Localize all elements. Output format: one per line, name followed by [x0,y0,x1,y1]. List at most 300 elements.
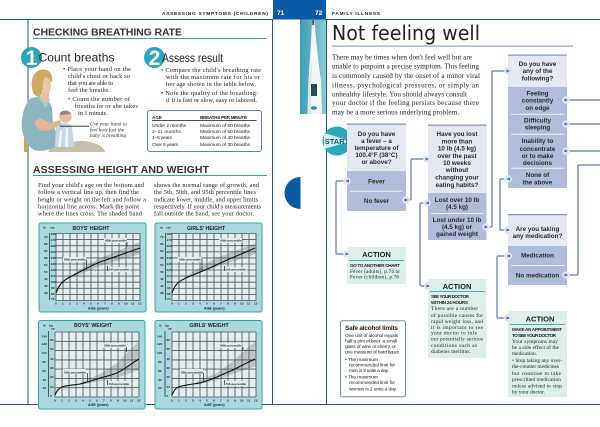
chart: girls' height: 160 [166,244,172,248]
chart: girls' height: AGE (years) [204,306,225,310]
chart: girls' height: GIRLS' HEIGHT [187,226,226,232]
chart: boys' weight: 120 [42,342,47,346]
heading: assessing height and weight: ASSESSING HEIGHT AND WEIGHT [33,164,210,176]
step 1 text: child's chest or back so [68,73,130,80]
chart: boys' weight: 95th percentile [104,344,126,348]
step 2 text: if it is fast or slow, easy or labored. [166,97,257,104]
chart: girls' height: 58 [160,256,164,260]
step 2 text: her age shown in the table below. [166,81,256,88]
chart: boys' weight: 8 [110,398,112,402]
intro paragraph: is commonly caused by the onset of a minor viral [332,72,480,80]
flow box: medication question [508,214,567,285]
chart: boys' weight: 10 [123,398,127,402]
photo caption with leader: feel how fast the [90,128,125,133]
chart: boys' weight: 50th percentile [64,370,86,374]
step 1 text: that you are able to [68,80,113,87]
chart: girls' weight: 40 [158,378,162,382]
chart: boys' weight: 1 [61,398,63,402]
chart: girls' height: 110 [166,274,172,278]
action box: see your doctor within 24 hours [428,279,486,358]
breathing rate table: AGE [152,115,162,120]
blue page tab half circle [284,177,300,209]
chart: boys' height: 8 [111,302,113,306]
chart: boys' height: cm [50,226,55,230]
action box: see your doctor within 24 hours: There are a number [431,306,478,312]
chart: boys' weight: 0 [50,394,52,398]
chart: boys' weight: 5 [89,398,91,402]
breathing rate table: Maximum of 50 breaths [200,129,251,135]
page number 72 [296,0,326,20]
chart: girls' weight: 4 [199,398,201,402]
callout: safe alcohol limits: • The maximum [345,374,378,380]
flow box: fever question: or above? [361,159,392,166]
chart: girls' weight: 3 [192,398,194,402]
intro paragraph: unable to pinpoint a precise symptom. This feeling [332,62,479,70]
connector nodes [343,67,570,322]
chart: boys' weight: 4 [82,398,84,402]
chart: boys' height: 5th percentile [109,268,129,272]
chart: boys' height: 54 [44,263,48,267]
chart: girls' weight: 10 [240,398,244,402]
intro paragraph: unhealthy lifestyle. You should always consult [332,90,467,98]
height and weight instructions: follow a vertical line up, then find the [38,189,139,196]
flow box: weight loss question: Lost under 10 lb [433,217,481,224]
step 1 title: Count breaths [38,50,114,64]
chart: boys' weight: 10 [50,385,54,389]
flow box: symptoms question: Feeling [526,90,549,98]
flow box: symptoms question: sleeping [525,124,550,132]
chart: girls' weight: 9 [234,398,236,402]
chart: girls' height: 9 [234,302,236,306]
photo caption with leader [60,122,128,139]
chart: boys' height: BOYS' HEIGHT [73,226,110,232]
photo caption with leader: baby is breathing [90,134,127,139]
photo caption with leader: Use your hand to [90,122,128,128]
chart: boys' height: 95th percentile [105,238,127,242]
callout: safe alcohol limits: recommended limit for [349,362,395,368]
chart: girls' height: 130 [166,262,172,266]
chart: boys' height: 0 [55,302,57,306]
chart: boys' weight: 9 [117,398,119,402]
start marker: START [325,137,350,146]
chart: girls' height: 50 [160,270,164,274]
chart: boys' weight: 3 [75,398,77,402]
flow box: symptoms question: Difficulty [524,118,551,124]
chart: boys' height: 6 [97,302,99,306]
chart: girls' weight: 30 [166,366,170,370]
right running header: FAMILY ILLNESS [332,11,381,17]
flow box: weight loss question: (4.5 kg) [446,204,468,211]
chart: girls' height: 70 [160,235,164,239]
chart: girls' weight: 100 [157,351,162,355]
breathing rate table: BREATHS PER MINUTE [200,115,247,120]
chart: girls' weight: 10 [166,385,170,389]
chart: boys' height: 100 [50,280,56,284]
action box: make an appointment: Your symptoms may [512,339,558,345]
page number 71 [273,0,296,20]
callout: safe alcohol limits: half a pint of beer, a small [345,338,397,344]
height and weight instructions: Find your child's age on the bottom and [38,182,145,189]
chart: boys' weight: lb [43,324,46,328]
action box: another chart [347,247,406,284]
action box: another chart: GO TO ANOTHER CHART [350,263,400,268]
chart: girls' weight: 50th percentile [181,370,203,374]
title: not feeling well: Not feeling well [332,21,480,45]
flow box: symptoms question: the above [523,180,553,186]
chart: girls' height: 140 [166,256,172,260]
flow box: weight loss question: 10 lb (4.5 kg) [438,146,476,152]
chart: girls' height: 0 [171,302,173,306]
intro paragraph: your doctor if the feeling persists because there [332,99,479,107]
chart: girls' height: 3 [192,302,194,306]
chart: boys' height: 1 [62,302,64,306]
flow box: weight loss question: eating habits? [436,182,478,189]
chart: boys' weight: kg [49,324,53,328]
flow box: fever question: No fever [364,198,390,205]
height and weight instructions: fall outside the band, see your doctor. [154,210,254,218]
action box: make an appointment: TO SEE YOUR DOCTOR [512,333,557,338]
action box: make an appointment: • Stop taking any over- [512,358,562,364]
action box: another chart: Fever (children), p.76 [350,274,399,280]
chart: boys' height: 180 [50,232,56,236]
breathing rate table [148,110,262,152]
flow box: fever question: a fever – a [361,138,392,145]
action box: see your doctor within 24 hours: your doctor to rule [431,330,478,336]
chart: girls' height [155,223,262,312]
step 1: count breaths [21,47,138,152]
chart: boys' weight: 60 [50,338,54,342]
step 1 text: • Place your hand on the [63,66,131,73]
step 2 text [161,67,261,104]
chart: girls' height: 170 [166,238,172,242]
chart: boys' weight: 140 [42,334,47,338]
chart: boys' height: 70 [51,297,55,301]
flow box: fever question: 100.4°F (38°C) [355,151,398,159]
chart: boys' height: 3 [76,302,78,306]
chart: girls' height: 120 [166,268,172,272]
action box: make an appointment: be a side effect of the [512,344,560,351]
flow box: medication question: Are you taking [516,226,560,233]
step 2 text: • Note the quality of the breathing: [161,90,258,97]
chart: boys' height: 66 [44,242,48,246]
chart: boys' height: 11 [131,302,135,306]
chart: boys' weight: 5th percentile [109,382,129,386]
chart: girls' weight: kg [165,324,169,328]
chart: girls' height: 150 [166,250,172,254]
chart: boys' height: 4 [83,302,85,306]
chart: boys' height: 120 [50,268,56,272]
step 1 text: • Count the number of [68,96,131,103]
action box: make an appointment: but continue to take [512,371,562,377]
chart: boys' weight: 60 [42,369,46,373]
breathing rate table: Maximum of 60 breaths [200,123,251,129]
chart: girls' weight: 1 [178,398,180,402]
chart: boys' height: 2 [69,302,71,306]
step 2 text: with the maximum rate for his or [166,74,261,81]
chart: boys' height: 170 [50,238,56,242]
flow box: symptoms question: any of the [523,68,553,75]
flow box: fever question: temperature of [354,145,399,152]
flow box: medication question: Medication [521,252,554,260]
flow box: weight loss question: more than [442,138,472,146]
flow box: weight loss question: over the past [437,153,477,160]
action box: see your doctor within 24 hours: ACTION [443,282,471,291]
chart: girls' weight: 0 [166,394,168,398]
callout: safe alcohol limits: Safe alcohol limits [345,325,398,332]
intro paragraph: illness, psychological pressures, or simply an [332,82,479,90]
chart: girls' weight: 140 [157,334,162,338]
action box: see your doctor within 24 hours: rapid weight loss, and [431,319,483,325]
flow box: weight loss question: (4.5 kg) or [442,224,473,231]
chart: girls' weight: 6 [213,398,215,402]
heading: checking breathing rate: CHECKING BREATHING RATE [33,26,182,38]
chart: boys' height [39,223,146,312]
start marker [322,126,352,156]
chart: boys' weight: AGE (years) [88,403,109,407]
title underline [332,46,573,47]
chart: boys' weight: 2 [68,398,70,402]
flow box: symptoms question: on edge [525,105,550,112]
chart: boys' weight: 20 [50,375,54,379]
chart: boys' weight: 6 [96,398,98,402]
chart: girls' height: in [160,226,163,230]
chart: boys' height: 58 [44,256,48,260]
chart: girls' weight: 8 [227,398,229,402]
chart: girls' weight: 7 [220,398,222,402]
chart: girls' weight: 11 [247,398,251,402]
chart: girls' height: 100 [166,280,172,284]
chart: girls' weight: 120 [157,342,162,346]
chart: boys' weight: 12 [137,398,141,402]
chart: girls' weight: 60 [166,338,170,342]
chart: girls' weight: 40 [166,357,170,361]
chart: girls' height: 90 [167,286,171,290]
chart: boys' weight: 100 [42,351,47,355]
flow box: medication question: No medication [516,272,559,280]
callout: safe alcohol limits: glass of wine or sherry, or [345,344,396,350]
callout: safe alcohol limits [340,321,406,397]
flow box: fever question: Fever [368,178,385,186]
flow box: symptoms question: following? [522,76,553,82]
step 1 text [63,66,138,117]
chart: girls' height: 8 [227,302,229,306]
action box: make an appointment: MAKE AN APPOINTMENT [512,327,562,332]
chart: girls' height: 62 [160,249,164,253]
chart: boys' height: 160 [50,244,56,248]
callout: safe alcohol limits: women is 2 units a day. [349,386,397,392]
chart: girls' height: 54 [160,263,164,267]
chart: girls' height: 7 [220,302,222,306]
step 2 text: • Compare the child's breathing rate [161,67,261,74]
chart: girls' weight: 5 [206,398,208,402]
callout: safe alcohol limits: men is 3 units a day. [349,368,389,374]
chart: girls' weight: 5th percentile [226,382,246,386]
chart: boys' height: 10 [124,302,128,306]
step 1 text: in 1 minute. [78,110,108,117]
chart: boys' weight: 11 [130,398,134,402]
breathing rate table: Maximum of 40 breaths [200,135,251,141]
chart: girls' height: 80 [167,292,171,296]
chart: boys' height: 80 [51,292,55,296]
chart: boys' weight [38,320,145,409]
height and weight instructions [38,182,262,218]
flow box: symptoms question: constantly [522,98,554,104]
flow box: symptoms question: None of [526,172,550,179]
chart: girls' height: 4 [199,302,201,306]
action box: another chart: ACTION [362,250,391,259]
left running header: ASSESSING SYMPTOMS (CHILDREN) [162,11,268,17]
step 2 number: 2 [149,47,160,70]
height and weight instructions: respectively. If your child's measurements [154,204,262,210]
breathing rate table: Under 2 months [152,123,187,129]
action box: make an appointment: unless advised to stop [512,384,562,390]
chart: girls' height: 66 [160,242,164,246]
flow box: symptoms question [508,54,567,188]
page number 72: 72 [315,10,323,17]
action box: make an appointment: by your doctor. [512,390,545,396]
chart: girls' height: cm [166,226,171,230]
flow box: weight loss question: Have you lost [437,131,478,138]
chart: girls' height: 2 [185,302,187,306]
breathing rate table: 2–11 months [152,129,182,135]
flow box: symptoms question: or to make [522,153,554,160]
chart: boys' height: 90 [51,286,55,290]
chart: girls' height: 70 [167,297,171,301]
action box: make an appointment: the-counter medicines [512,364,559,370]
action box: see your doctor within 24 hours: SEE YOUR DOCTOR [431,294,470,299]
chart: boys' height: 42 [44,284,48,288]
chart: boys' height: 50 [44,270,48,274]
chart: girls' weight: 50 [166,347,170,351]
chart: boys' height: 5 [90,302,92,306]
flow box: weight loss question: without [445,167,469,174]
action box: see your doctor within 24 hours: diabetes mellitus. [431,349,471,355]
chart: boys' height: 150 [50,250,56,254]
height and weight instructions: horizontal line across. Mark the point [38,204,139,210]
action box: see your doctor within 24 hours: WITHIN 24 HOURS [431,300,468,305]
flow box: symptoms question: Do you have [519,61,557,68]
flow box: symptoms question: decisions [523,160,553,167]
chart: girls' weight: 95th percentile [220,344,242,348]
chart: girls' height: 95th percentile [220,238,242,242]
step 2 title: Assess result [162,51,224,65]
chart: boys' height: 130 [50,262,56,266]
chart: boys' weight: 40 [42,378,46,382]
flow box: fever question: Do you have [358,131,396,138]
intro paragraph: There may be times when don't feel well but are [332,54,472,62]
flow box: fever question [347,124,406,211]
chart: girls' weight: GIRLS' WEIGHT [189,323,229,329]
chart: girls' weight: 0 [171,398,173,402]
chart: boys' weight: 20 [42,386,46,390]
action box: make an appointment: prescribed medication [512,377,561,383]
photo: mother and baby [22,70,105,152]
chart: girls' weight: 60 [158,369,162,373]
chart: boys' weight: 70 [51,327,55,331]
chart: girls' height: 1 [178,302,180,306]
flow connectors [336,71,600,318]
page number 71: 71 [277,10,285,17]
step 1 text: feel the breaths. [68,87,110,94]
chart: girls' weight: 20 [166,375,170,379]
chart: girls' weight [155,320,262,409]
action box: see your doctor within 24 hours: it is important to see [431,325,484,331]
action box: make an appointment: ACTION [526,314,554,324]
callout: safe alcohol limits: One unit of alcohol equals [345,333,399,339]
chart: boys' weight: 80 [42,360,46,364]
flow box: weight loss question: changing your [435,174,479,182]
flow box: symptoms question: concentrate [520,146,556,153]
callout: safe alcohol limits: • The maximum [345,357,378,363]
chart: girls' height: 6 [213,302,215,306]
chart: boys' weight: BOYS' WEIGHT [74,323,113,329]
chart: boys' height: 9 [118,302,120,306]
chart: girls' weight: 70 [168,327,172,331]
action box: make an appointment [508,311,567,397]
height and weight instructions: where the lines cross. The shaded band [38,210,143,218]
step 1 text: breaths he or she takes [75,103,138,110]
intro paragraph: may be a more serious underlying problem. [332,108,459,116]
action box: see your doctor within 24 hours: out potentially serious [431,336,483,342]
flow box: weight loss question [428,124,486,240]
flow box: medication question: any medication? [513,233,562,240]
chart: boys' height: 140 [50,256,56,260]
height and weight instructions: the 5th, 50th, and 95th percentile lines [154,189,256,196]
chart: girls' weight: 20 [158,386,162,390]
action box: see your doctor within 24 hours: conditions such as [431,343,477,349]
flow box: weight loss question: 10 weeks [443,160,471,167]
breathing rate table: Maximum of 30 breaths [200,142,251,148]
callout: safe alcohol limits: one measure of hard liquor. [345,350,400,356]
intro paragraph [332,54,480,116]
chart: boys' height: 50th percentile [64,258,86,262]
height and weight instructions: shows the normal range of growth, and [154,182,260,189]
chart: boys' height: 110 [50,274,56,278]
flow box: weight loss question: gained weight [436,231,479,238]
chart: boys' height: 7 [104,302,106,306]
flow box: symptoms question: Inability to [522,138,553,145]
height and weight instructions: height or weight on the left and follow a [38,196,146,204]
chart: boys' weight: 50 [50,347,54,351]
chart: boys' height: 12 [138,302,142,306]
height and weight instructions: indicate lower, middle, and upper limits [154,196,258,204]
chart: girls' height: 38 [160,291,164,295]
step 1 number: 1 [26,47,38,70]
flow box: weight loss question: Lost over 10 lb [435,197,479,204]
chart: girls' weight: 80 [158,360,162,364]
chart: girls' height: 46 [160,277,164,281]
thermometer photo [300,20,326,114]
chart: boys' height: 38 [44,291,48,295]
action box: another chart: Fever (adults), p.74 or [350,268,400,275]
chart: boys' weight: 0 [54,398,56,402]
step 2: assess result [144,47,262,152]
chart: girls' weight: AGE (years) [204,403,225,407]
action box: see your doctor within 24 hours: of possible causes for [431,312,483,319]
chart: girls' height: 10 [240,302,244,306]
chart: boys' weight: 40 [50,357,54,361]
chart: girls' height: 50th percentile [179,258,201,262]
chart: boys' height: 46 [44,277,48,281]
chart: girls' height: 42 [160,284,164,288]
breathing rate table: 1–5 years [152,135,173,141]
chart: boys' weight: 30 [50,366,54,370]
chart: boys' height: AGE (years) [88,306,109,310]
chart: girls' height: 5 [206,302,208,306]
chart: girls' weight: lb [159,324,162,328]
callout: safe alcohol limits: recommended limit for [349,380,395,386]
chart: girls' height: 180 [166,232,172,236]
